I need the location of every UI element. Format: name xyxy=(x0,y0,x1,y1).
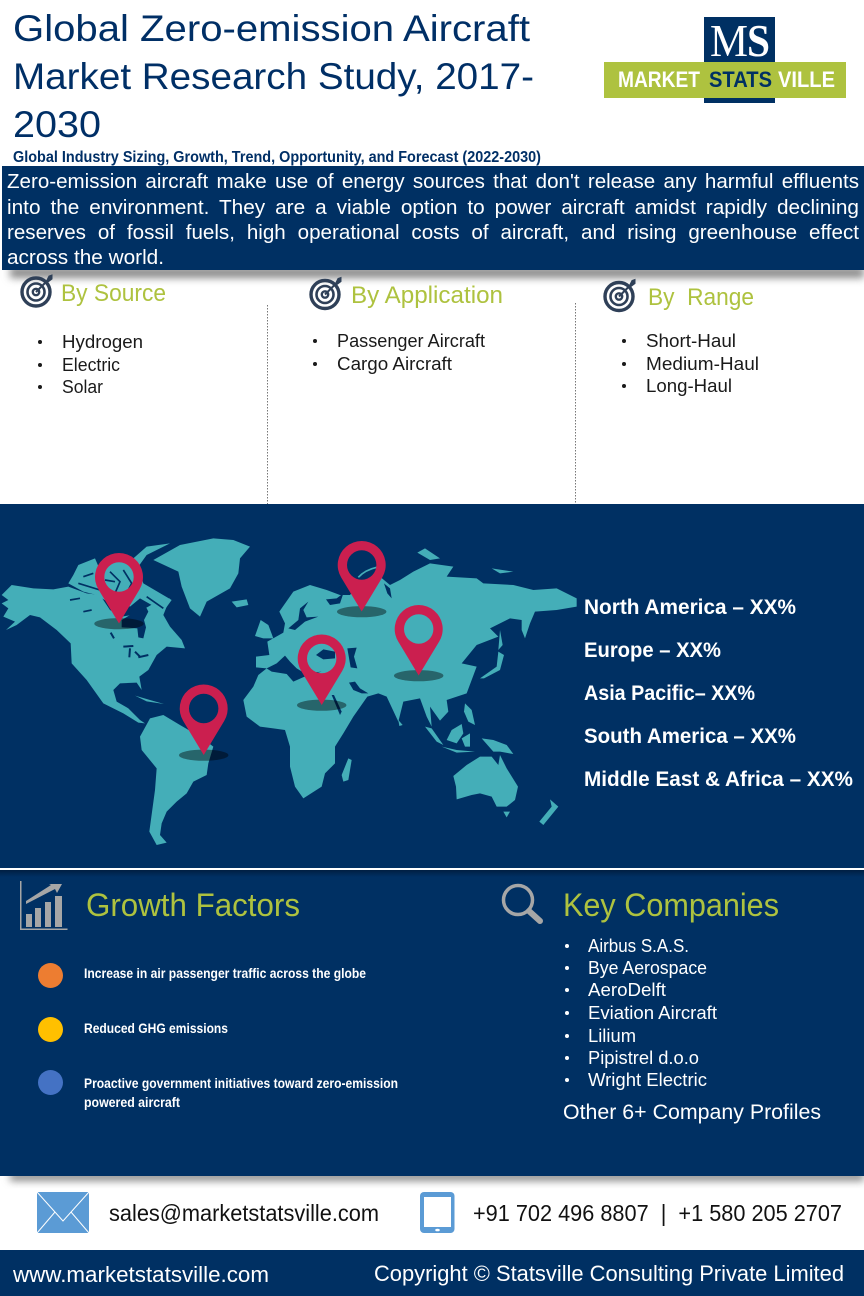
company list: Pipistrel d.o.o xyxy=(588,1048,699,1068)
icon: target xyxy=(22,275,52,306)
islands and australia xyxy=(342,548,558,825)
region shares: Middle East & Africa – XX% xyxy=(584,768,853,791)
icon: tablet xyxy=(420,1192,454,1233)
iceland, caribbean and south america xyxy=(135,599,248,845)
great britain and ireland xyxy=(255,620,273,638)
panel: by source: Electric xyxy=(62,355,120,375)
heading: growth factors: Growth Factors xyxy=(86,887,300,923)
contact row: sales@marketstatsville.com xyxy=(109,1200,379,1226)
pin: asia xyxy=(394,605,443,681)
factor 3: Proactive government initiatives toward zero-emission xyxy=(84,1076,398,1091)
panel: by application: By Application xyxy=(351,282,503,309)
panel: by range: Short-Haul xyxy=(646,331,736,351)
icon: bar chart xyxy=(20,881,68,930)
title: Global Zero-emission Aircraft xyxy=(13,8,531,49)
europe asia africa mainland xyxy=(243,563,577,798)
company list xyxy=(563,936,821,1124)
logo: VILLE xyxy=(778,67,835,92)
heading: key companies: Key Companies xyxy=(563,887,779,923)
icon: magnifier xyxy=(504,886,540,921)
factor 3 xyxy=(38,1070,398,1110)
factor 3: powered aircraft xyxy=(84,1095,180,1110)
title: 2030 xyxy=(13,104,101,145)
logo: M xyxy=(710,15,748,66)
north america and arctic xyxy=(2,538,250,723)
icon: target xyxy=(605,280,635,310)
factor 1: Increase in air passenger traffic across the globe xyxy=(84,966,366,981)
inland seas xyxy=(267,583,392,715)
contact row xyxy=(37,1192,842,1233)
panel: by range xyxy=(605,280,759,396)
panel: growth factors and key companies xyxy=(0,870,864,1181)
panel: by range: Medium-Haul xyxy=(646,354,759,374)
icon: envelope xyxy=(37,1192,89,1233)
region shares: North America – XX% xyxy=(584,596,796,619)
world map xyxy=(2,538,577,845)
description panel: reserves of fossil fuels, high operational costs of aircraft, and rising greenhouse effect xyxy=(7,222,859,244)
company list: Airbus S.A.S. xyxy=(588,936,689,956)
title: Market Research Study, 2017- xyxy=(13,56,534,97)
panel: regional map xyxy=(0,504,864,868)
company list: AeroDelft xyxy=(588,980,666,1000)
panel: by range: Long-Haul xyxy=(646,376,732,396)
panel: by source: Hydrogen xyxy=(62,332,143,352)
panel: by application xyxy=(311,278,503,374)
region shares xyxy=(584,596,853,791)
hudson bay and channels xyxy=(70,570,163,657)
region shares: Asia Pacific– XX% xyxy=(584,682,755,705)
icon: target xyxy=(311,278,341,308)
company list: Wright Electric xyxy=(588,1070,707,1090)
logo: STATS xyxy=(709,67,772,92)
panel: by application: Cargo Aircraft xyxy=(337,354,452,374)
greenland xyxy=(153,538,250,617)
factor 1 xyxy=(38,963,366,988)
description panel: across the world. xyxy=(7,247,164,269)
panel: by range: By Range xyxy=(648,284,754,311)
logo: MARKET xyxy=(618,67,700,92)
factor 2 xyxy=(38,1017,228,1042)
footer bar: Copyright © Statsville Consulting Private Limited xyxy=(374,1261,844,1286)
panel: by source: Solar xyxy=(62,377,103,397)
subtitle: Global Industry Sizing, Growth, Trend, Opportunity, and Forecast (2022-2030) xyxy=(13,149,541,166)
description panel: Zero-emission aircraft make use of energy sources that don't release any harmful effluents xyxy=(7,171,859,193)
company list: Bye Aerospace xyxy=(588,958,707,978)
footer bar: www.marketstatsville.com xyxy=(12,1262,269,1287)
pin: europe xyxy=(337,541,386,617)
company list: Eviation Aircraft xyxy=(588,1003,717,1023)
company list: Lilium xyxy=(588,1026,636,1046)
panel: by application: Passenger Aircraft xyxy=(337,331,485,351)
pin: middle east xyxy=(297,635,346,711)
description panel: into the environment. They are a viable option to power aircraft amidst rapidly declining xyxy=(7,197,859,219)
factor 2: Reduced GHG emissions xyxy=(84,1021,228,1036)
title xyxy=(13,8,534,145)
logo xyxy=(604,15,846,103)
panel: by source xyxy=(22,275,166,397)
footer bar xyxy=(0,1250,864,1296)
region shares: Europe – XX% xyxy=(584,639,721,662)
pin: north america xyxy=(94,553,144,629)
panel: by source: By Source xyxy=(61,280,166,307)
novaya zemlya xyxy=(358,567,377,577)
description panel xyxy=(2,166,864,278)
region shares: South America – XX% xyxy=(584,725,796,748)
pin: south america xyxy=(179,685,228,761)
contact row: +91 702 496 8807 | +1 580 205 2707 xyxy=(473,1200,842,1226)
logo: S xyxy=(747,15,770,66)
company list: Other 6+ Company Profiles xyxy=(563,1101,821,1124)
